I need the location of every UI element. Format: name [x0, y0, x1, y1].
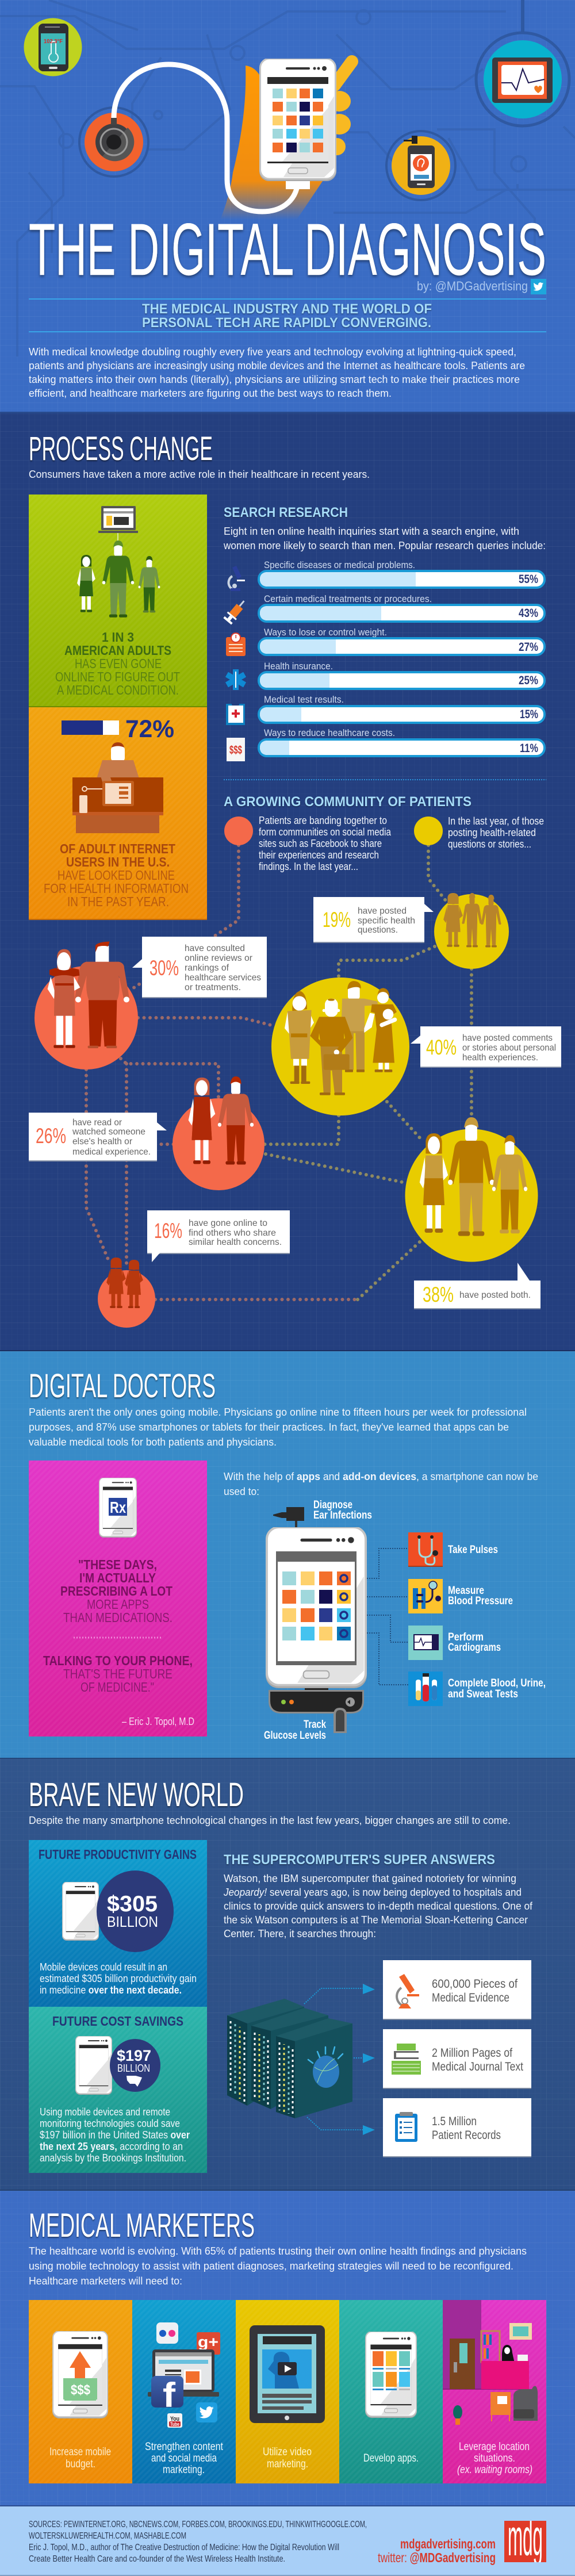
diagram connector lines — [351, 1548, 408, 1685]
box: patient records — [383, 2098, 531, 2157]
bar: diseases 55%: Specific diseases or medical problems. — [264, 560, 415, 570]
app grid — [273, 89, 323, 152]
text: watson paragraph: the six Watson computers is at The Memorial Sloan-Kettering Cancer — [224, 1914, 528, 1926]
icon: phone with 305 billion badge: $305 — [107, 1892, 158, 1916]
icon: orange microscope — [397, 1974, 419, 2008]
text: adult internet users: OF ADULT INTERNET — [60, 841, 175, 856]
icon: twitter — [196, 2402, 217, 2422]
quote text: THAN MEDICATIONS. — [63, 1610, 172, 1625]
panel: location situations — [443, 2300, 546, 2483]
panel: future productivity gains: estimated $305 billion productivity gain — [40, 1972, 197, 1984]
icon: google plus: g+ — [198, 2333, 218, 2351]
bar: diseases 55%: 55% — [519, 573, 538, 586]
footer sources: Eric J. Topol, M.D., author of The Creative Destruction of Medicine: How the Digital Revolution Will — [29, 2543, 339, 2552]
callout: 26 percent — [29, 1113, 167, 1162]
bar: treatments 43% — [259, 594, 545, 622]
text: watson paragraph: Watson, the IBM supercomputer that gained notoriety for winning — [224, 1872, 516, 1884]
label: blood urine sweat tests — [448, 1677, 546, 1700]
subtitle: THE MEDICAL INDUSTRY AND THE WORLD OF — [142, 301, 432, 317]
callout: 19 percent: questions. — [358, 925, 398, 935]
label: measure blood pressure: Measure — [448, 1585, 484, 1597]
text: medical marketers intro: The healthcare world is evolving. With 65% of patients trusting their own online health findings and physicians — [29, 2245, 527, 2257]
callout: 16 percent — [147, 1210, 290, 1262]
panel: quote — [29, 1460, 207, 1736]
panel: future productivity gains: in medicine over the next decade. — [40, 1984, 182, 1996]
callout: 30 percent: 30% — [150, 956, 179, 980]
icon: tablet heart monitor circle — [476, 33, 569, 126]
panel: location situations: Leverage location — [459, 2441, 530, 2453]
icon: three people — [77, 540, 160, 618]
bar: costs 11%: Ways to reduce healthcare costs. — [264, 728, 395, 738]
icon: rx phone: Rx — [110, 1498, 126, 1516]
quote text: TALKING TO YOUR PHONE, — [43, 1653, 193, 1668]
footer sources: SOURCES: PEWINTERNET.ORG, NBCNEWS.COM, FORBES.COM, BROOKINGS.EDU, THINKWITHGOOGLE.COM, — [29, 2520, 367, 2529]
panel: future cost savings: analysis by the Brookings Institution. — [40, 2152, 186, 2164]
callout: 40 percent: or stories about personal — [462, 1043, 556, 1053]
legend: red circle text: findings. In the last year... — [259, 860, 358, 872]
panel: content and social media — [132, 2300, 236, 2483]
text: search research intro: Eight in ten online health inquiries start with a search engine, with — [224, 525, 519, 537]
panel: content and social media: and social media — [151, 2452, 217, 2464]
tower 1 — [227, 1999, 304, 2106]
panel: video marketing — [236, 2300, 339, 2483]
legend: yellow circle text — [414, 815, 544, 850]
heading: process change: PROCESS CHANGE — [29, 430, 213, 467]
icon: youtube — [167, 2413, 182, 2428]
intro paragraph: With medical knowledge doubling roughly every five years and technology evolving at lightning-quick speed, — [29, 346, 516, 358]
right woman with baby — [364, 988, 397, 1072]
logo: mdg — [504, 2521, 546, 2562]
panel: increase mobile budget — [29, 2300, 132, 2483]
bar: diseases 55% — [259, 560, 545, 588]
icon: phone with 197 billion badge: $197 — [117, 2047, 151, 2064]
text: medical marketers intro: Healthcare marketers will need to: — [29, 2275, 182, 2287]
callout: 30 percent — [132, 937, 267, 998]
heading: medical marketers: MEDICAL MARKETERS — [29, 2207, 255, 2244]
icon: clipboard — [395, 2112, 417, 2142]
left woman — [285, 991, 314, 1084]
text: apps intro: used to: — [224, 1485, 259, 1497]
heading: digital doctors: DIGITAL DOCTORS — [29, 1367, 216, 1405]
legend: yellow circle text: In the last year, of those — [448, 815, 544, 827]
callout: 38 percent: have posted both. — [459, 1290, 531, 1300]
text: 1 in 3: ONLINE TO FIGURE OUT — [55, 669, 180, 684]
bar: weight 27%: 27% — [519, 641, 538, 654]
icon: glucose reader — [269, 1688, 364, 1733]
text: watson paragraph: Jeopardy! several years ago, is now being deployed to hospitals and — [223, 1886, 522, 1898]
icon: laptop — [98, 506, 138, 543]
panel: 72 percent of internet users — [29, 707, 207, 920]
intro paragraph: patients and physicians are increasingly using mobile devices and the Internet as healthcare tools. Patients are — [29, 359, 525, 371]
icon: thermometer phone circle: 102.3°F — [44, 39, 63, 45]
panel: video marketing: marketing. — [267, 2458, 308, 2470]
panel: location situations: situations. — [474, 2452, 515, 2464]
text: watson paragraph: clinics to provide quick answers to in-depth medical questions. One of — [224, 1900, 533, 1912]
legend: red circle text: form communities on social media — [259, 826, 392, 838]
quote text: THAT'S THE FUTURE — [63, 1666, 172, 1681]
footer contact: mdgadvertising.com — [400, 2536, 496, 2551]
box: medical evidence: Medical Evidence — [432, 1991, 509, 2004]
box: medical journal text — [383, 2029, 531, 2089]
panel: future productivity gains: FUTURE PRODUCTIVITY GAINS — [39, 1847, 197, 1862]
intro paragraph: efficient, and healthcare marketers are figuring out the best ways to reach them. — [29, 387, 392, 399]
stat: 72%: 72% — [125, 715, 174, 743]
back man — [341, 981, 378, 1072]
icon: phone with 305 billion badge — [62, 1870, 174, 1952]
label: perform cardiograms — [448, 1631, 501, 1654]
icon: medical test clipboard — [226, 702, 245, 725]
node: 30 percent couple — [34, 941, 138, 1070]
text: 1 in 3: HAS EVEN GONE — [75, 656, 162, 671]
callout: 40 percent: have posted comments — [462, 1033, 553, 1043]
text: adult internet users: IN THE PAST YEAR. — [67, 894, 169, 909]
tower 2 — [251, 2008, 328, 2109]
legend: yellow circle text: posting health-related — [448, 826, 536, 838]
icon: phone with 305 billion badge: BILLION — [107, 1913, 158, 1930]
tower 3 — [276, 2018, 352, 2118]
intro paragraph — [29, 346, 525, 399]
quote text: I'M ACTUALLY — [79, 1570, 156, 1585]
subtitle: PERSONAL TECH ARE RAPIDLY CONVERGING. — [142, 315, 431, 331]
icon: tablet with video — [250, 2325, 325, 2423]
callout: 16 percent: 16% — [154, 1219, 182, 1243]
label: take pulses: Take Pulses — [448, 1544, 498, 1556]
subtitle — [29, 298, 546, 332]
bar: treatments 43%: Certain medical treatments or procedures. — [264, 594, 432, 604]
panel: future cost savings: FUTURE COST SAVINGS — [52, 2014, 183, 2029]
legend: red circle text: sites such as Facebook to share — [259, 837, 382, 849]
icon: blood pressure cuff — [408, 1579, 443, 1613]
quote text: – Eric J. Topol, M.D — [122, 1716, 194, 1727]
callout: 19 percent: specific health — [358, 916, 415, 926]
connector dots: yellow network — [264, 845, 471, 1300]
icon: person at desk — [72, 742, 163, 833]
text: watson paragraph: Center. There, it searches through: — [224, 1927, 376, 1939]
callout: 30 percent: rankings of — [185, 963, 229, 973]
panel: location situations: (ex. waiting rooms) — [457, 2464, 532, 2476]
bar: weight 27%: Ways to lose or control weight. — [264, 627, 387, 638]
divider dots — [224, 779, 546, 780]
bar: insurance 25% — [259, 661, 545, 689]
panel: develop apps: Develop apps. — [363, 2452, 419, 2464]
panel: develop apps — [339, 2300, 443, 2483]
node: 40 percent family — [271, 977, 409, 1116]
legend: yellow circle text: questions or stories... — [448, 838, 531, 850]
text: adult internet users: FOR HEALTH INFORMATION — [44, 881, 189, 896]
icon: thermometer phone circle — [24, 18, 82, 76]
bar: treatments 43%: 43% — [519, 607, 538, 620]
footer contact — [378, 2536, 496, 2565]
text: 1 in 3: 1 IN 3 — [102, 630, 134, 645]
callout: 40 percent: 40% — [426, 1036, 457, 1059]
text: digital doctors intro — [29, 1406, 527, 1448]
bar: costs 11%: 11% — [520, 742, 538, 755]
text: adult internet users — [44, 841, 189, 909]
footer sources — [29, 2520, 367, 2564]
label: diagnose ear infections — [313, 1499, 372, 1521]
bar: insurance 25%: 25% — [519, 674, 538, 687]
text: digital doctors intro: Patients aren't the only ones going mobile. Physicians go online nine to fifteen hours per week for professional — [29, 1406, 527, 1418]
callout: 30 percent: have consulted — [185, 944, 245, 953]
byline with twitter icon: by: @MDGadvertising — [417, 279, 528, 293]
icon: facebook — [151, 2376, 183, 2414]
bar: weight 27% — [259, 627, 545, 655]
panel: increase mobile budget: Increase mobile — [49, 2446, 111, 2458]
icon: take pulses stethoscope — [408, 1532, 443, 1567]
quote text: OF MEDICINE." — [80, 1680, 154, 1695]
label: track glucose levels — [264, 1719, 326, 1742]
callout: 38 percent — [414, 1263, 540, 1309]
panel: content and social media: marketing. — [163, 2464, 205, 2476]
legend: red circle text: Patients are banding together to — [259, 814, 387, 826]
icon: rx phone — [99, 1478, 137, 1538]
text: adult internet users: USERS IN THE U.S. — [66, 854, 170, 869]
IBM globe — [308, 2047, 343, 2088]
connector dots: red network — [86, 845, 358, 1300]
footer sources: WOLTERSKLUWERHEALTH.COM, MASHABLE.COM — [29, 2531, 186, 2541]
footer sources: Create Better Health Care and co-founder of the West Wireless Health Institute. — [29, 2554, 285, 2564]
quote text — [43, 1557, 194, 1727]
panel: video marketing: Utilize video — [263, 2446, 312, 2458]
bar: test results 15% — [259, 695, 545, 723]
label: track glucose levels: Glucose Levels — [264, 1730, 326, 1742]
icon: phone with 197 billion badge — [75, 2036, 160, 2095]
icon: cardiogram monitor — [408, 1626, 443, 1660]
callout: 26 percent: else's health or — [72, 1137, 133, 1147]
bar: insurance 25%: Health insurance. — [264, 661, 333, 672]
bar: test results 15%: 15% — [520, 708, 538, 721]
icon: microscope — [229, 566, 245, 591]
icon: books — [392, 2044, 421, 2075]
callout: 26 percent: medical experience. — [72, 1147, 151, 1157]
icon: star of life — [225, 669, 246, 690]
text: medical marketers intro — [29, 2245, 527, 2287]
text: watson paragraph — [223, 1872, 533, 1939]
node: 26 percent couple — [172, 1076, 264, 1190]
label: blood urine sweat tests: and Sweat Tests — [448, 1688, 518, 1700]
label: measure blood pressure — [448, 1585, 513, 1607]
panel: future productivity gains — [29, 1840, 207, 2007]
text: 1 in 3: AMERICAN ADULTS — [64, 643, 171, 658]
label: diagnose ear infections: Ear Infections — [313, 1509, 372, 1521]
label: track glucose levels: Track — [304, 1719, 326, 1731]
label: perform cardiograms: Perform — [448, 1631, 484, 1643]
text: search research intro: women more likely to search than men. Popular research queries include: — [223, 539, 546, 551]
label: perform cardiograms: Cardiograms — [448, 1642, 501, 1654]
text: brave new world intro: Despite the many smartphone technological changes in the last few years, bigger changes are still to come. — [29, 1814, 511, 1826]
text: digital doctors intro: purposes, and 87% use smartphones or tablets for their practices. In fact, they've learned that apps can be — [29, 1421, 509, 1433]
panel: future productivity gains: Mobile devices could result in an — [40, 1961, 167, 1973]
heading: brave new world: BRAVE NEW WORLD — [29, 1776, 244, 1814]
icon: watson supercomputer — [227, 1999, 352, 2118]
icon: syringe — [223, 597, 248, 625]
callout: 26 percent: 26% — [36, 1124, 66, 1148]
heading: supercomputer: THE SUPERCOMPUTER'S SUPER ANSWERS — [224, 1852, 495, 1868]
callout: 19 percent — [313, 897, 434, 943]
panel: future cost savings: the next 25 years, according to an — [40, 2140, 183, 2152]
quote text: "THESE DAYS, — [78, 1557, 157, 1572]
text: apps intro: With the help of apps and add-on devices, a smartphone can now be — [224, 1470, 538, 1482]
box: patient records: 1.5 Million — [432, 2115, 477, 2128]
icon: facebook: f — [163, 2376, 176, 2414]
heading: search research: SEARCH RESEARCH — [224, 505, 348, 520]
icon: google plus — [197, 2332, 220, 2355]
node: 16 percent silhouettes — [98, 1258, 155, 1328]
panel: future cost savings: Using mobile devices and remote — [40, 2106, 170, 2118]
callout: 16 percent: similar health concerns. — [189, 1237, 282, 1247]
icon: youtube: You — [170, 2416, 179, 2422]
icon: youtube: Tube — [170, 2421, 179, 2427]
callout: 30 percent: healthcare services — [185, 973, 261, 983]
bar: test results 15%: Medical test results. — [264, 695, 344, 705]
callout: 40 percent: health experiences. — [462, 1053, 538, 1063]
icon: hand holding smartphone with stethoscope cable — [114, 59, 352, 220]
box: patient records: Patient Records — [432, 2129, 501, 2142]
legend: red circle text: their experiences and research — [259, 849, 379, 861]
label: diagnose ear infections: Diagnose — [313, 1499, 352, 1511]
icon: laptop with website — [148, 2349, 219, 2397]
icon: phone with 197 billion badge: BILLION — [117, 2063, 150, 2074]
icon: big smartphone with apps — [266, 1527, 367, 1688]
box: medical journal text: 2 Million Pages of — [432, 2046, 512, 2060]
panel: content and social media: Strengthen content — [145, 2441, 224, 2453]
header circuit background — [0, 0, 575, 356]
callout: 16 percent: have gone online to — [189, 1218, 267, 1228]
text: digital doctors intro: valuable medical tools for both patients and physicians. — [29, 1436, 277, 1448]
callout: 26 percent: watched someone — [72, 1127, 145, 1137]
bar: 72 percent — [62, 720, 119, 735]
header circuit stem to tablet — [521, 0, 524, 33]
icon: phone with money arrow: $$$ — [71, 2382, 91, 2398]
footer contact: twitter: @MDGadvertising — [378, 2550, 496, 2565]
quote text: PRESCRIBING A LOT — [60, 1584, 172, 1598]
callout: 30 percent: online reviews or — [185, 953, 253, 963]
panel: future cost savings — [29, 2007, 207, 2173]
illustration: waiting room — [443, 2300, 538, 2425]
node: 19 percent silhouettes — [434, 893, 509, 969]
icon: scale clipboard — [226, 633, 246, 656]
old man — [310, 999, 352, 1095]
arrows: servers to data boxes — [304, 1984, 375, 2135]
box: medical evidence — [383, 1960, 531, 2020]
icon: ear phone circle — [386, 131, 455, 200]
text: 1 in 3 — [55, 630, 180, 697]
icon: phone with money arrow — [52, 2331, 108, 2418]
panel: increase mobile budget: budget. — [66, 2458, 95, 2470]
panel: future cost savings: $197 billion in the United States over — [40, 2129, 190, 2141]
icon: cost sheet: $$$ — [229, 744, 242, 757]
text: adult internet users: HAVE LOOKED ONLINE — [57, 868, 175, 883]
callout: 30 percent: or treatments. — [185, 983, 241, 992]
icon: ear plug device — [273, 1507, 304, 1527]
label: measure blood pressure: Blood Pressure — [448, 1595, 513, 1607]
text: medical marketers intro: using mobile technology to assist with patient diagnoses, marketing strategies will need to be reconfigured. — [29, 2260, 513, 2272]
label: blood urine sweat tests: Complete Blood, Urine, — [448, 1677, 546, 1689]
icon: phone with app tiles — [365, 2332, 417, 2418]
icon: flickr — [156, 2322, 178, 2344]
text: 1 in 3: A MEDICAL CONDITION. — [57, 683, 179, 697]
callout: 19 percent: 19% — [323, 908, 351, 931]
legend: red circle text — [224, 814, 392, 872]
icon: cost sheet — [227, 738, 245, 761]
box: medical journal text: Medical Journal Text — [432, 2060, 523, 2073]
bar: costs 11% — [259, 728, 545, 756]
intro paragraph: taking matters into their own hands (literally), physicians are utilizing smart tech to make their practices more — [29, 373, 520, 385]
text: apps intro — [224, 1470, 538, 1497]
box: medical evidence: 600,000 Pieces of — [432, 1977, 518, 1991]
panel: 1 in 3 american adults — [29, 494, 207, 707]
callout: 26 percent: have read or — [72, 1118, 122, 1128]
panel: future cost savings: monitoring technologies could save — [40, 2117, 180, 2129]
icon: test tubes — [408, 1672, 443, 1706]
icon: stethoscope head on orange circle — [79, 108, 148, 177]
callout: 38 percent: 38% — [423, 1283, 454, 1306]
callout: 19 percent: have posted — [358, 906, 407, 916]
quote text: MORE APPS — [87, 1597, 149, 1612]
callout: 16 percent: find others who share — [189, 1228, 276, 1238]
bar chart: popular research queries — [259, 560, 545, 756]
text: process change intro: Consumers have taken a more active role in their healthcare in recent years. — [29, 468, 370, 480]
callout: 40 percent — [411, 1026, 561, 1068]
node: 38 percent group — [405, 1117, 538, 1262]
heading: growing community: A GROWING COMMUNITY OF PATIENTS — [224, 794, 471, 810]
text: search research intro — [223, 525, 546, 551]
